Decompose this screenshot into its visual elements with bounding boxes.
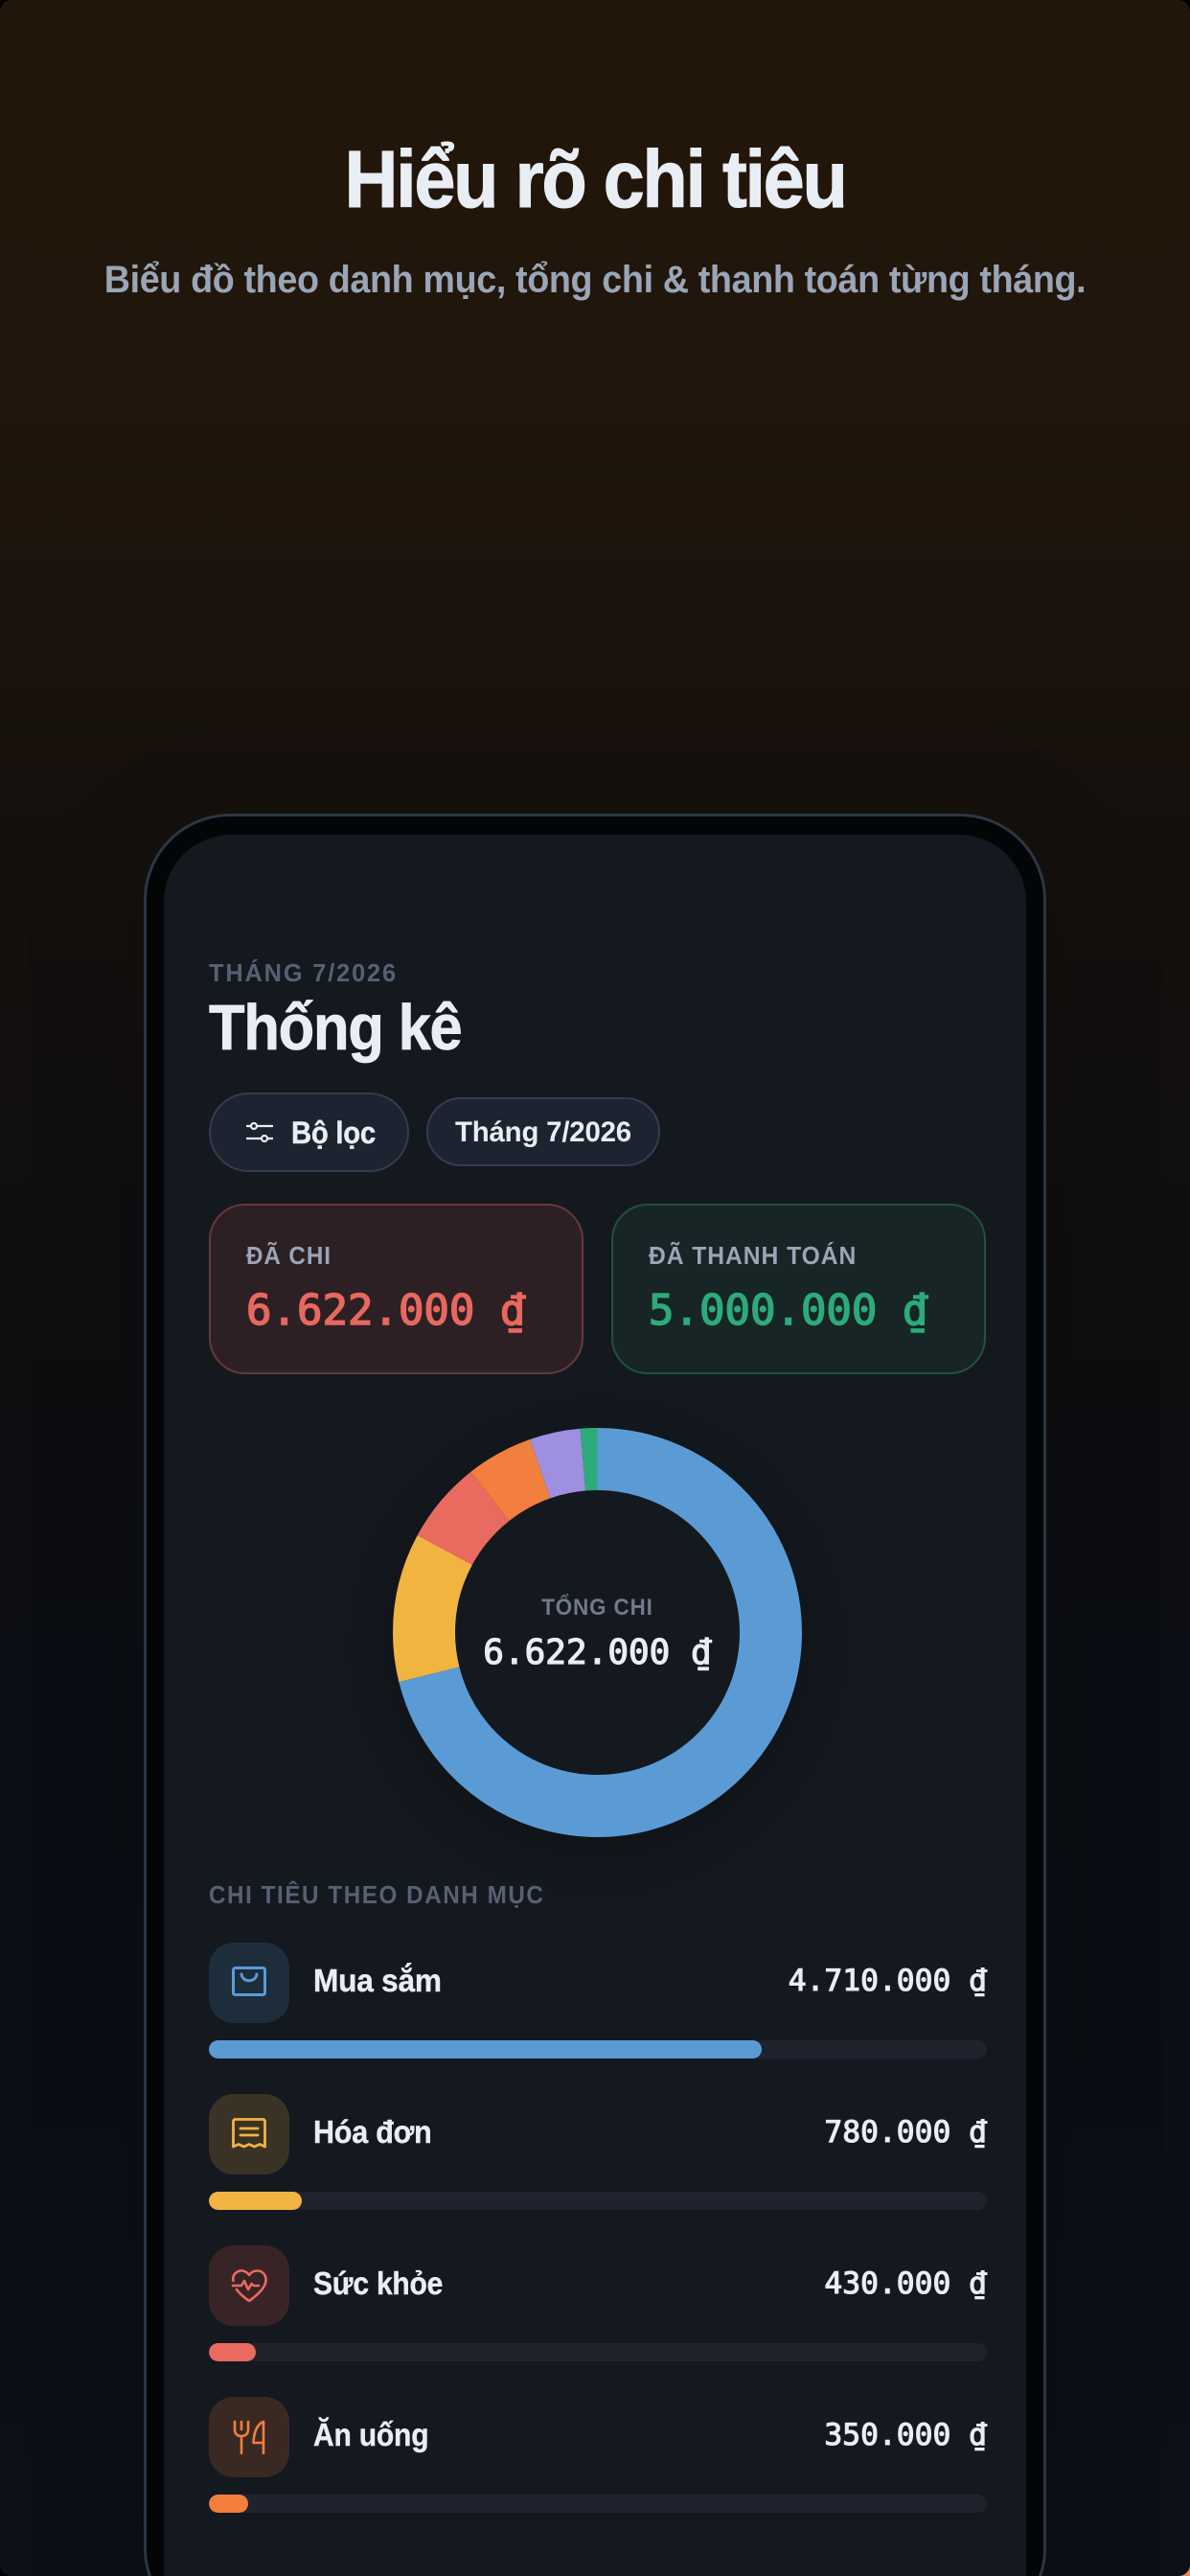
category row: food	[209, 2397, 988, 2513]
panel: paid	[611, 1204, 986, 1374]
month pill	[426, 1097, 660, 1166]
spent label: ĐÃ CHI	[246, 1241, 332, 1270]
eyebrow: month: THÁNG 7/2026	[209, 958, 398, 987]
phone screen	[164, 835, 1026, 2576]
filter label: Bộ lọc	[291, 1116, 376, 1150]
title: Hiểu rõ chi tiêu	[344, 134, 846, 224]
category name: Mua sắm	[313, 1963, 442, 1998]
category name: Ăn uống	[313, 2417, 428, 2452]
section heading: by category: CHI TIÊU THEO DANH MỤC	[209, 1880, 544, 1909]
icon: fork and knife	[209, 2397, 289, 2477]
donut centre value: 6.622.000 ₫	[483, 1633, 712, 1672]
donut centre label: TỔNG CHI	[541, 1595, 653, 1621]
progress bar	[209, 2192, 987, 2210]
filter pill	[209, 1092, 409, 1172]
category row: health	[209, 2245, 988, 2361]
donut ring	[393, 1428, 802, 1837]
subtitle: Biểu đồ theo danh mục, tổng chi & thanh toán từng tháng.	[104, 259, 1086, 301]
category name: Sức khỏe	[313, 2266, 443, 2301]
category name: Hóa đơn	[313, 2114, 432, 2150]
category row: bills	[209, 2094, 988, 2210]
phone frame	[144, 814, 1046, 2576]
category amount: 430.000 ₫	[824, 2266, 987, 2301]
icon: heart pulse	[209, 2245, 289, 2326]
donut chart	[393, 1428, 802, 1837]
month label: Tháng 7/2026	[455, 1116, 631, 1148]
icon: receipt	[209, 2094, 289, 2174]
category amount: 350.000 ₫	[824, 2418, 987, 2452]
heading: statistics: Thống kê	[209, 992, 462, 1064]
progress bar	[209, 2040, 987, 2058]
panel: spent	[209, 1204, 584, 1374]
progress bar	[209, 2495, 987, 2513]
paid value: 5.000.000 ₫	[649, 1286, 927, 1335]
category amount: 780.000 ₫	[824, 2115, 987, 2150]
progress bar	[209, 2343, 987, 2361]
corner accent	[1175, 2561, 1190, 2576]
category amount: 4.710.000 ₫	[789, 1964, 987, 1998]
spent value: 6.622.000 ₫	[246, 1286, 525, 1335]
paid label: ĐÃ THANH TOÁN	[649, 1241, 857, 1270]
icon: shopping bag	[209, 1943, 289, 2023]
category row: shopping	[209, 1943, 988, 2058]
icon: sliders	[246, 1121, 273, 1142]
